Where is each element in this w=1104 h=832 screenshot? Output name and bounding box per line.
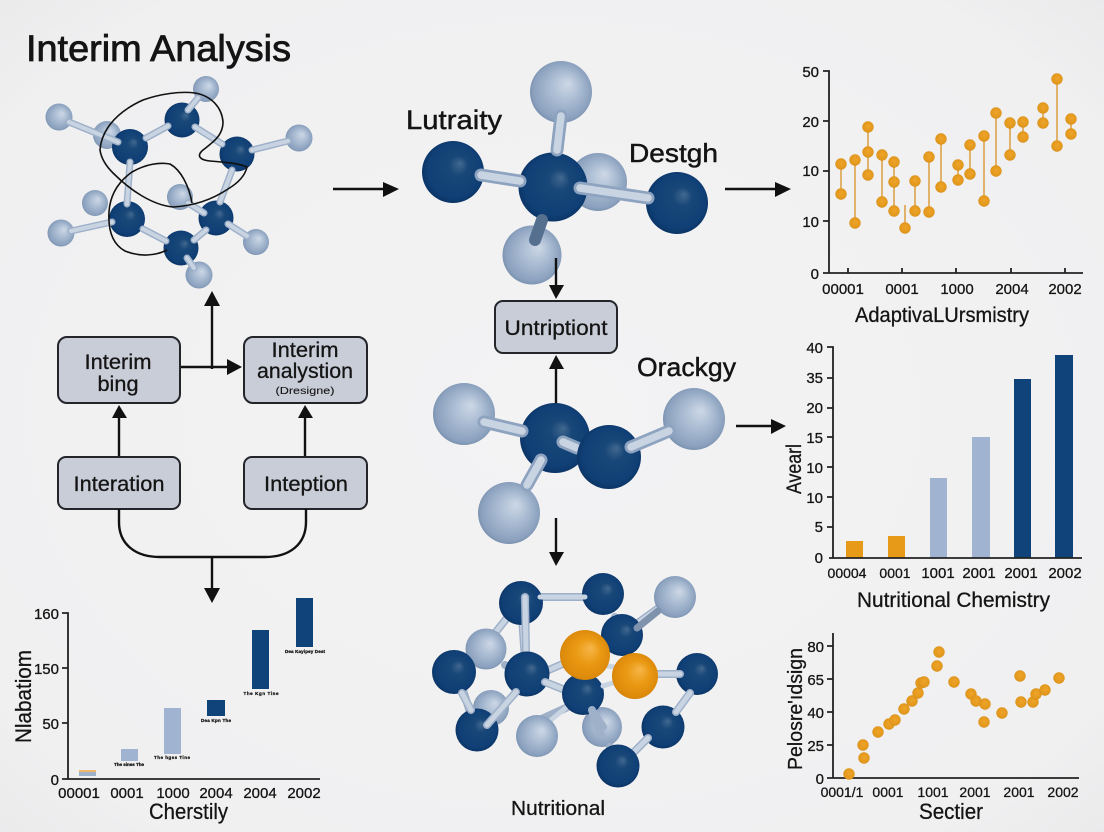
x axis labels: 2004 [199,785,233,802]
y axis label: Nlabatiom: Nlabatiom [11,650,36,743]
arrow: molecule to central molecule [333,182,399,197]
arrow: middle molecule down to bottom molecule [549,518,564,566]
x axis labels: 00001 [822,281,864,298]
chart: bottom-right scatter [807,633,1079,800]
y axis labels: 0 [51,772,59,789]
box: Untriptiont [495,301,617,353]
y axis label: Pelosre'idsign: Pelosre'ıdsign [785,648,807,770]
box: Inteption: Inteption [264,473,348,496]
molecule: central top [422,61,708,284]
x axis labels: 2002 [1048,281,1082,298]
axes [62,613,320,779]
y axis labels: 10 [802,214,819,231]
y axis labels: 40 [807,705,824,722]
x axis labels: 1000 [940,281,974,298]
y axis labels: 150 [34,661,59,678]
x axis labels: 2002 [1047,784,1079,800]
y axis labels: 10 [802,163,819,180]
arrow: Interim bing to Interim analysis [181,359,242,375]
y axis label: Avearl: Avearl [783,444,806,494]
x axis labels: 2001 [962,565,996,582]
x axis labels: 1001 [921,565,955,582]
box: Interim analysation: Interim [272,339,338,362]
tiny bar captions: The sines The [114,762,144,767]
box: Interim analysation [244,337,367,403]
tiny bar captions: Dea Kpn The [201,718,231,723]
box: Interation [58,457,180,509]
x axis labels: 2004 [243,785,277,802]
chart: bottom-left floating bars [34,598,326,802]
x axis labels: 00001 [58,785,100,802]
y axis labels: 0 [816,771,824,788]
chart title: Adaptival Lrsmistry: AdaptivaLUrsmistry [855,304,1029,327]
x axis labels: 0001 [885,281,919,298]
x axis labels: 00004 [828,565,867,581]
chart axes [823,71,1083,273]
box: Untriptiont: Untriptiont [504,317,608,340]
arrow: Interation to Interim bing [112,405,127,457]
x axis labels [58,785,321,802]
x axis labels: 2001 [959,784,991,800]
x axis labels: 2004 [995,281,1029,298]
x axis labels: 2001 [1004,565,1038,582]
x axis labels: 1000 [156,785,190,802]
y axis labels: 20 [802,114,819,131]
molecule: central middle [433,383,725,544]
y axis labels: 10 [806,460,823,477]
label: Nutritional: Nutritional [511,798,605,820]
x axis labels: 0001 [872,784,904,800]
y axis labels: 50 [42,716,59,733]
tiny bar captions: The Kgn Tine [244,691,279,696]
x axis labels: 0001 [879,565,911,581]
y axis labels: 15 [806,430,823,447]
x axis labels: 2002 [287,785,321,802]
molecule: top-left ring [46,76,312,288]
tiny bar captions: The hgss Tine [154,755,190,760]
x axis labels: 0001/1 [821,784,864,800]
arrow: middle molecule to Untriptiont box [549,355,564,404]
label: Oracksy: Orackgy [637,352,736,382]
y axis labels: 35 [806,370,823,387]
tiny bar captions: Dea Kayipey Dest [285,649,326,654]
arrow: central molecule to scatter chart [725,182,791,197]
label: Destgh: Destgh [629,138,718,168]
tiny bar captions [114,649,326,767]
label: Lutraity: Lutraity [406,105,503,135]
x axis labels [821,784,1079,800]
axes [827,633,1079,778]
x axis labels: 2001 [1003,784,1035,800]
bars [79,598,313,776]
x axis labels: 0001 [110,785,144,802]
y axis labels [807,639,824,788]
y axis labels: 10 [806,490,823,507]
y axis labels: 160 [34,606,59,623]
y axis labels: 80 [807,639,824,656]
y axis labels [802,64,819,283]
chart title: Sectier: Sectier [919,799,983,824]
arrow: middle molecule to bar chart [736,419,786,434]
connector: merged flow down to bottom chart [119,509,306,603]
y axis labels: 5 [815,519,823,536]
y axis labels: 0 [815,550,823,567]
chart title: Cherstily: Cherstily [149,799,228,824]
y axis labels [806,340,823,567]
y axis labels: 65 [807,672,824,689]
arrow: Interim bing up to molecule [204,291,220,369]
box: Interim bing: Interim [84,351,152,374]
molecule: bottom cluster with orange atoms [432,573,718,788]
y axis labels: 0 [811,266,819,283]
y axis labels: 40 [806,340,823,357]
box: Interim bing [58,337,180,403]
y axis labels: 50 [802,64,819,81]
y axis labels: 25 [807,738,824,755]
chart title: Nutritional Chemistry: Nutritional Chemistry [857,589,1050,612]
bars [846,355,1073,558]
x axis labels: 2002 [1048,565,1082,582]
axes [827,347,1082,558]
arrow: top molecule to Untriptiont box [549,258,564,299]
x axis labels [828,565,1082,582]
title: Interim Analysis [26,28,291,69]
box: Interim analysation: analystion [257,360,353,383]
x axis labels: 1001 [917,784,949,800]
chart: top-right range dots [802,64,1083,298]
box: Interim bing: bing [98,373,138,396]
box: Inteption [244,457,367,509]
box: Interim analysation: (Dresigne) [276,385,334,397]
box: Interation: Interation [74,473,164,496]
x axis labels [822,281,1082,298]
arrow: Inteption to Interim analysis [298,405,313,457]
y axis labels [34,606,59,789]
y axis labels: 20 [806,400,823,417]
chart: bar chart Nutritional Chemistry [806,340,1082,582]
